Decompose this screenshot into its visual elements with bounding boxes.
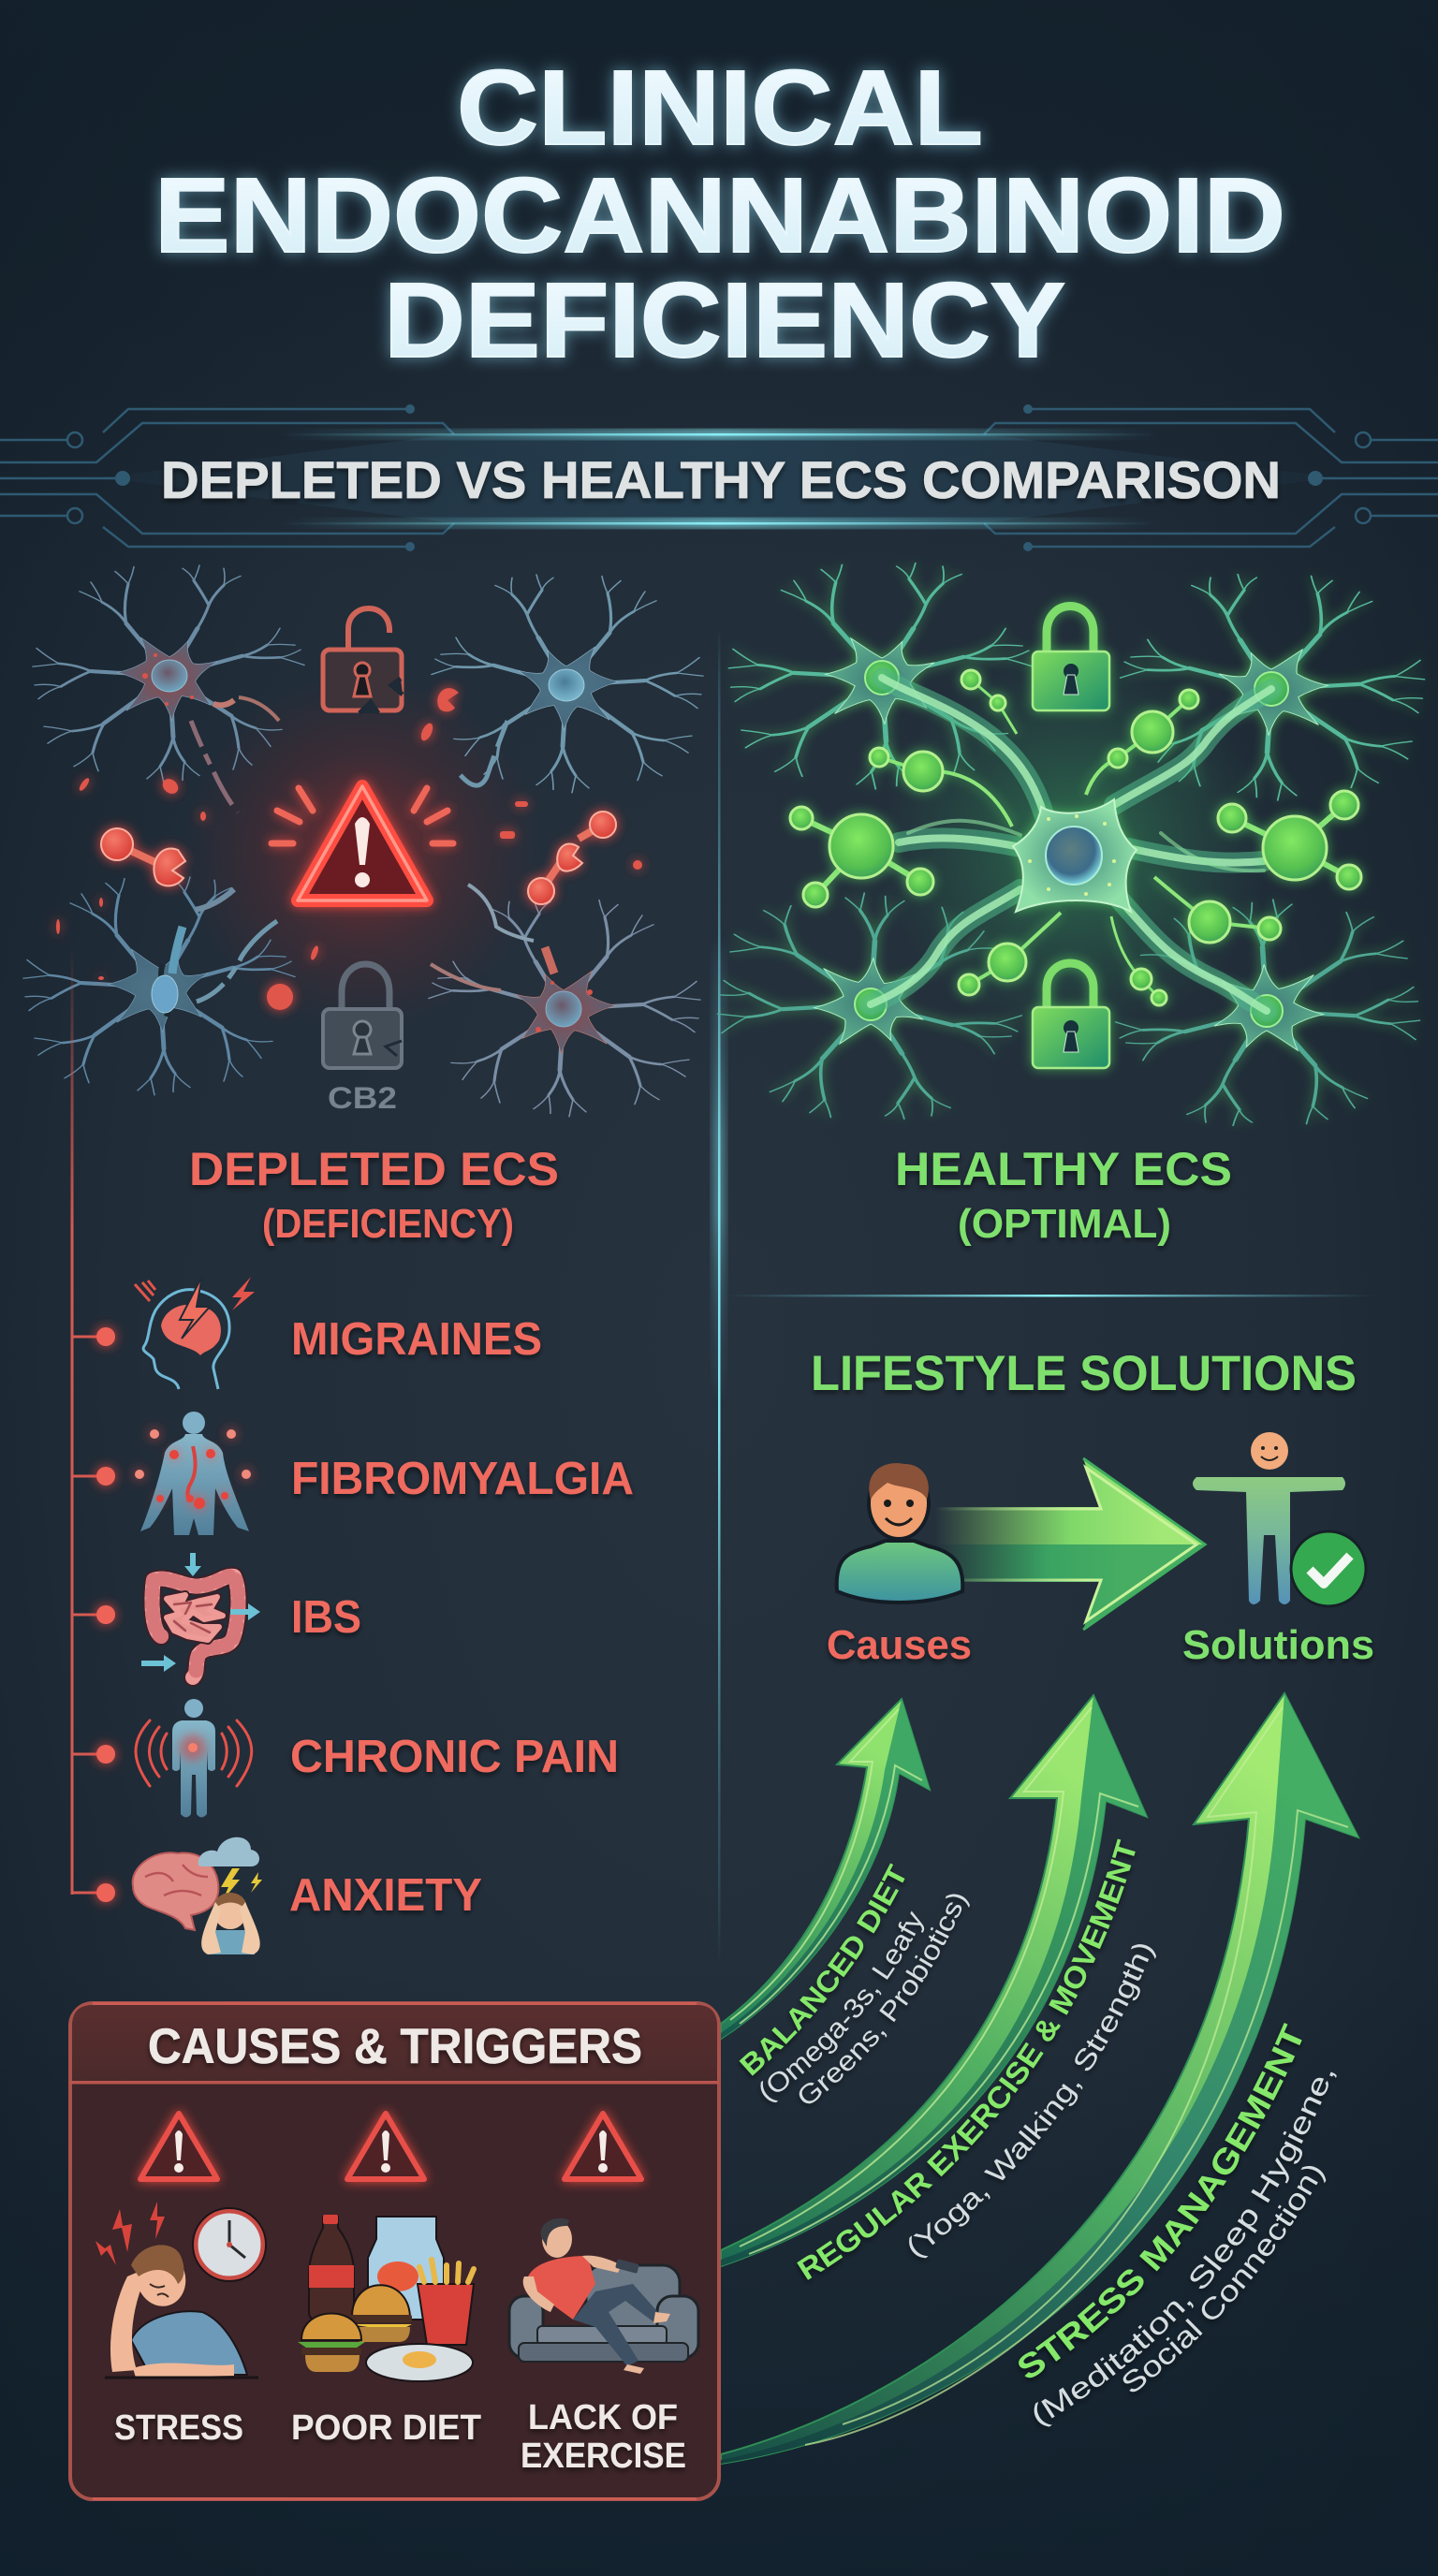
icon: warning triangle: [271, 786, 453, 900]
icon: broken lock: [323, 608, 403, 713]
icon: intestines: [152, 1576, 238, 1677]
symptom: migraines: [135, 1276, 542, 1389]
label: causes: Causes: [827, 1622, 972, 1668]
heading: lifestyle solutions: LIFESTYLE SOLUTIONS: [811, 1346, 1357, 1401]
solution label: stress management: STRESS MANAGEMENT: [1019, 2023, 1302, 2381]
neuron: upper left: [33, 565, 304, 812]
neuron: upper right healthy: [1121, 575, 1425, 800]
arrow: balanced diet: [721, 1699, 930, 2039]
center divider: [713, 627, 725, 1966]
icon: brain, storm cloud and worried person: [133, 1837, 262, 1954]
neuron: lower left: [23, 877, 295, 1095]
solution label: balanced diet: (Omega-3s, Leafy: [760, 1911, 925, 2104]
heading: depleted ECS: DEPLETED ECS: [189, 1143, 559, 1195]
solution label: balanced diet: [740, 1863, 970, 2107]
icon: warning triangle: [140, 2114, 217, 2179]
icon: person on couch: [509, 2218, 698, 2374]
panel: healthy ECS illustration: [717, 564, 1425, 1125]
icon: junk food: [298, 2215, 474, 2381]
icon: body with tender points: [135, 1412, 251, 1535]
heading: healthy ECS: [895, 1143, 1232, 1247]
cause column: stress: [95, 2114, 266, 2448]
label: solutions: Solutions: [1182, 1622, 1374, 1668]
icon: warning triangle: [565, 2114, 641, 2179]
icon: migraine head: [135, 1276, 255, 1389]
axons: [871, 678, 1271, 1011]
icon: warning triangle: [347, 2114, 424, 2179]
central neuron: [1013, 799, 1137, 912]
title: [154, 49, 1285, 379]
causes to solutions diagram: [827, 1432, 1374, 1668]
subtitle banner: [0, 404, 1438, 551]
cause column: lack of exercise: EXERCISE: [521, 2437, 686, 2476]
label: fibromyalgia: FIBROMYALGIA: [291, 1454, 634, 1504]
heading: causes & triggers: CAUSES & TRIGGERS: [148, 2019, 642, 2074]
icon: stressed person and clock: [95, 2202, 266, 2378]
cause column: poor diet: [291, 2114, 481, 2448]
arrow: causes to solutions: [934, 1458, 1205, 1630]
title: ENDOCANNABINOID: [154, 156, 1285, 274]
title: CLINICAL: [457, 49, 983, 167]
arrow: stress management: [721, 1693, 1358, 2464]
label: IBS: IBS: [291, 1592, 361, 1643]
label: migraines: MIGRAINES: [291, 1314, 542, 1365]
cause column: lack of exercise: [509, 2114, 698, 2476]
icon: grey lock: [323, 964, 402, 1068]
icon: green lock bottom: [1033, 963, 1109, 1068]
divider right: [726, 1295, 1376, 1297]
label: anxiety: ANXIETY: [289, 1870, 482, 1921]
solution label: balanced diet: Greens, Probiotics): [799, 1895, 970, 2107]
solution label: regular exercise: REGULAR EXERCISE & MOVEMENT: [797, 1838, 1136, 2282]
arrow: exercise: [721, 1695, 1147, 2266]
symptom: chronic pain: [136, 1699, 619, 1818]
neuron: lower right healthy: [1116, 900, 1420, 1125]
solution label: regular exercise: (Yoga, Walking, Strength): [908, 1944, 1156, 2261]
icon: green lock top: [1033, 607, 1109, 710]
solution label: balanced diet: BALANCED DIET: [740, 1863, 904, 2078]
subtitle text: DEPLETED VS HEALTHY ECS COMPARISON: [161, 450, 1281, 509]
heading: healthy ECS: HEALTHY ECS: [895, 1143, 1232, 1195]
molecule fragments: [56, 688, 642, 1010]
icon: broken molecule left: [101, 828, 185, 886]
neuron: upper left healthy: [728, 564, 1033, 789]
solution label: stress management: Social Connection): [1123, 2166, 1326, 2394]
label: stress: STRESS: [114, 2408, 243, 2448]
label: CB2: CB2: [328, 1081, 397, 1115]
solution label: stress management: (Meditation, Sleep Hygiene,: [1034, 2072, 1337, 2428]
heading: healthy ECS: (OPTIMAL): [958, 1201, 1171, 1247]
label: chronic pain: CHRONIC PAIN: [290, 1732, 619, 1782]
neuron: upper right: [432, 575, 703, 793]
heading: depleted ECS: (DEFICIENCY): [262, 1201, 514, 1247]
icon: person causes: [837, 1463, 962, 1603]
panel: causes and triggers: [70, 2002, 719, 2500]
label: poor diet: POOR DIET: [291, 2408, 481, 2448]
symptom: anxiety: [133, 1837, 482, 1954]
label: lack of exercise: LACK OF: [528, 2398, 678, 2437]
icon: healthy figure with check: [1193, 1432, 1366, 1606]
symptom: IBS: [141, 1553, 361, 1677]
icon: body with pain waves: [136, 1699, 252, 1818]
neuron: lower left healthy: [717, 893, 1021, 1119]
molecules: [801, 680, 1349, 998]
icon: broken molecule right: [528, 812, 616, 904]
title: DEFICIENCY: [384, 261, 1065, 379]
neuron: lower right: [429, 885, 700, 1117]
symptom timeline: [71, 945, 115, 1902]
heading: depleted ECS: [189, 1143, 559, 1247]
symptom: fibromyalgia: [135, 1412, 634, 1535]
panel: depleted ECS illustration: [23, 565, 703, 1117]
icon: intestine arrows: [141, 1553, 260, 1672]
